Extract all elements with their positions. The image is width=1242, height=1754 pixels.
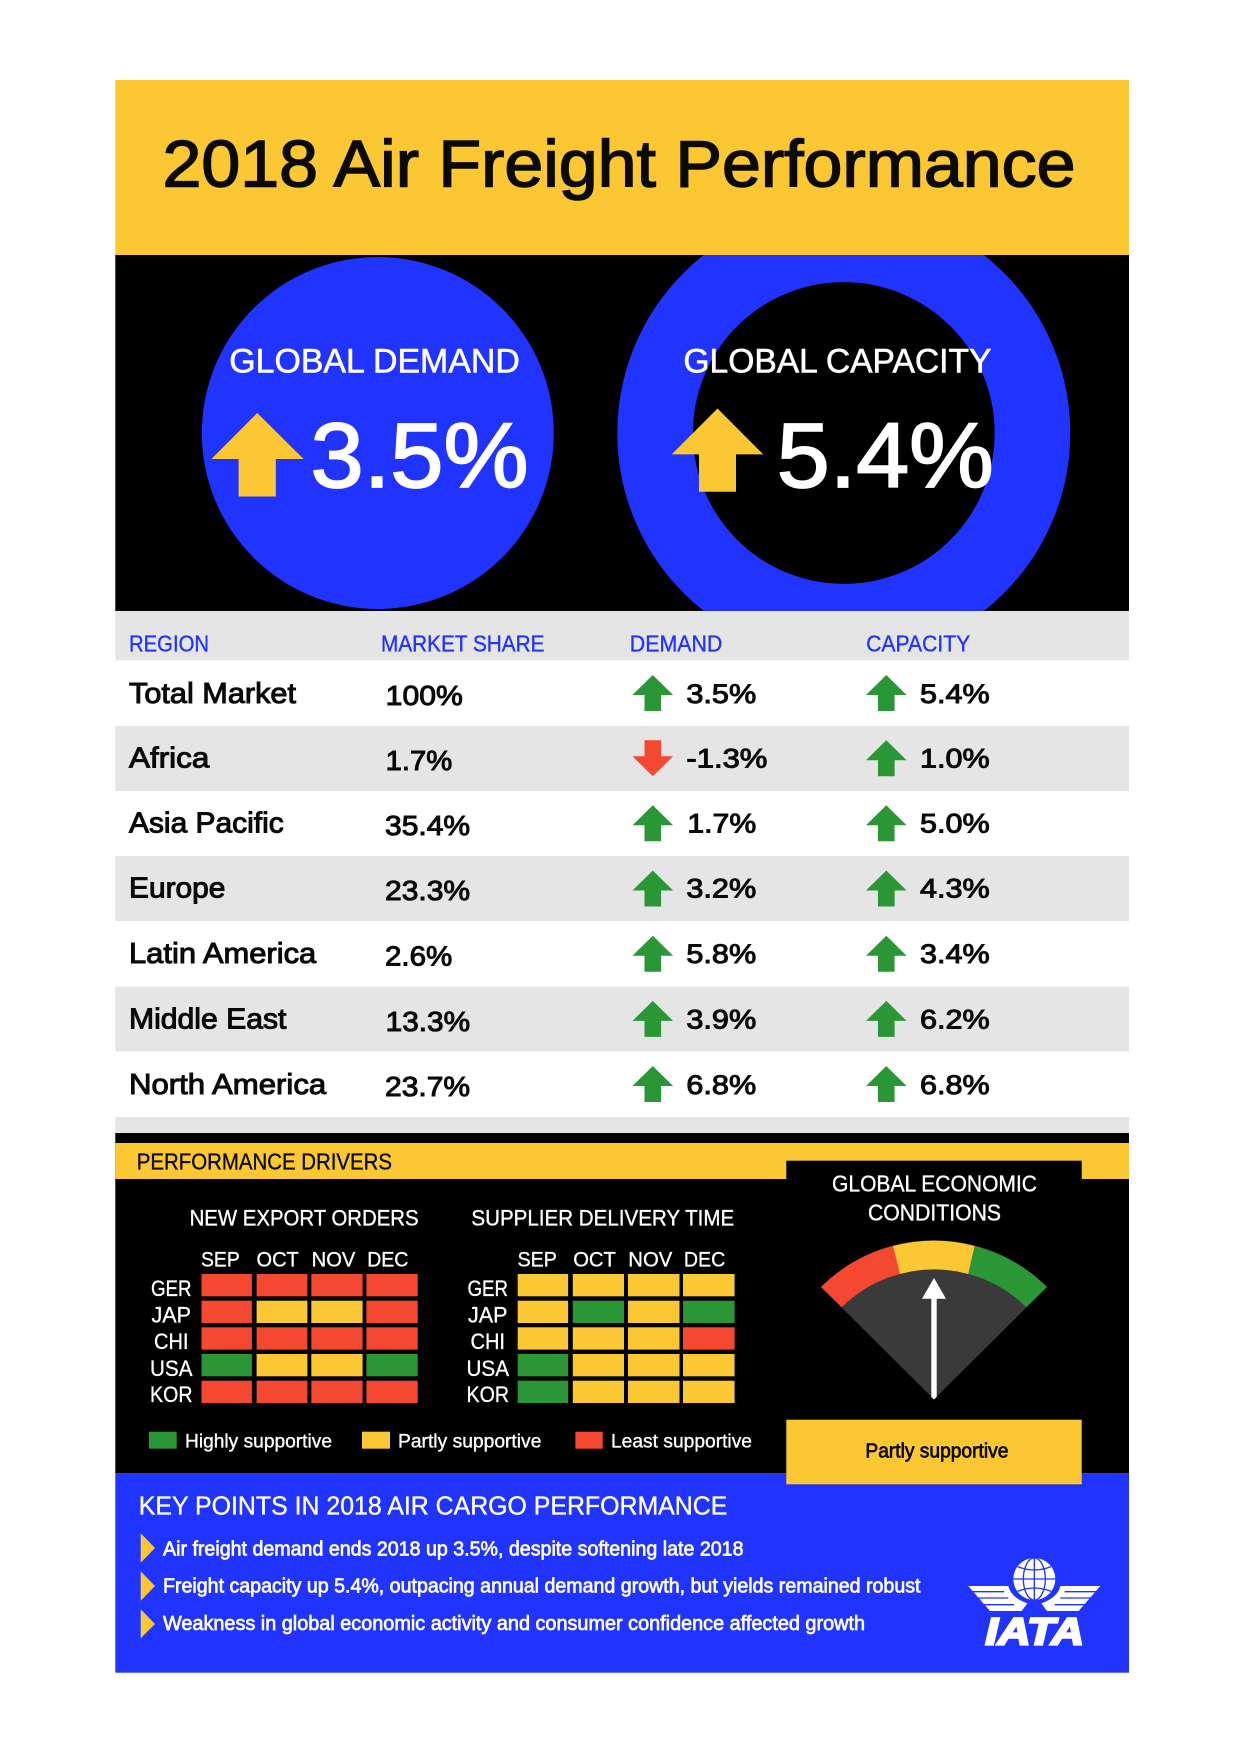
row: Total Market: Total Market — [129, 678, 296, 710]
callout: partly supportive — [786, 1420, 1082, 1484]
row: North America: North America — [129, 1069, 326, 1101]
capacity value: 5.4% — [777, 405, 994, 507]
chart: supplier delivery time heatmap: USA — [466, 1356, 509, 1381]
row: Asia Pacific — [129, 805, 990, 841]
heading: global demand: GLOBAL DEMAND — [229, 343, 520, 381]
row: Europe: 4.3% — [920, 874, 990, 904]
gauge segment: green — [968, 1246, 1047, 1307]
row: Total Market — [129, 675, 990, 711]
panel: regional table — [115, 611, 1129, 1133]
chart: new export orders heatmap: GER — [151, 1276, 192, 1301]
heading: global economic conditions: GLOBAL ECONOMIC — [832, 1171, 1037, 1197]
row: Latin America: 3.4% — [920, 939, 990, 969]
row: Latin America: 5.8% — [686, 939, 756, 969]
legend — [149, 1430, 752, 1452]
gauge — [821, 1240, 1047, 1400]
panel: performance drivers — [115, 1133, 1129, 1473]
legend: Least supportive — [611, 1430, 752, 1452]
global capacity ring — [655, 244, 1032, 622]
key point 2: Freight capacity up 5.4%, outpacing annual demand growth, but yields remained robust — [163, 1574, 921, 1597]
row: Asia Pacific: Asia Pacific — [129, 808, 284, 840]
table header: DEMAND — [630, 630, 722, 656]
icon: IATA logo — [968, 1557, 1100, 1653]
chart: supplier delivery time heatmap: SEP — [518, 1248, 557, 1272]
row: Africa: 1.7% — [386, 745, 452, 776]
chart: supplier delivery time heatmap: JAP — [468, 1302, 508, 1327]
gauge segment: yellow — [893, 1241, 975, 1274]
row: Total Market: 5.4% — [920, 679, 990, 709]
icon: IATA logo: IATA — [985, 1611, 1084, 1653]
row: Asia Pacific: 5.0% — [920, 809, 990, 839]
row: Middle East: Middle East — [129, 1004, 286, 1036]
icon: demand up arrow — [211, 413, 304, 496]
legend: Highly supportive — [185, 1430, 332, 1452]
table header: MARKET SHARE — [381, 630, 544, 656]
chart: new export orders heatmap: OCT — [256, 1248, 299, 1272]
chart: supplier delivery time heatmap: NOV — [628, 1248, 673, 1272]
chart: new export orders heatmap: USA — [150, 1356, 193, 1381]
heading: performance drivers: PERFORMANCE DRIVERS — [137, 1148, 392, 1174]
row: Latin America — [129, 936, 990, 972]
chart: new export orders heatmap: DEC — [367, 1248, 408, 1272]
row: Total Market: 3.5% — [686, 679, 756, 709]
panel: global economic conditions — [786, 1161, 1082, 1484]
row: Africa — [129, 740, 990, 776]
row: Europe — [129, 870, 990, 906]
row: Africa: Africa — [129, 743, 210, 775]
chart: supplier delivery time heatmap: GER — [468, 1276, 508, 1301]
row: Africa: 1.0% — [920, 744, 990, 774]
row: Asia Pacific: 1.7% — [687, 809, 756, 839]
chart: supplier delivery time heatmap: DEC — [684, 1248, 725, 1272]
panel: global demand and capacity — [115, 244, 1129, 622]
row: North America: 6.8% — [920, 1070, 990, 1100]
row: North America: 23.7% — [385, 1071, 470, 1102]
row: Europe: Europe — [129, 873, 225, 905]
table header — [129, 630, 970, 656]
title: 2018 Air Freight Performance — [162, 126, 1076, 200]
chart: new export orders heatmap: KOR — [150, 1382, 192, 1407]
demand value: 3.5% — [310, 405, 528, 507]
row: Africa: -1.3% — [686, 744, 767, 774]
row: North America — [129, 1066, 990, 1102]
heading: global economic conditions: CONDITIONS — [868, 1200, 1001, 1226]
callout: partly supportive: Partly supportive — [865, 1441, 1008, 1463]
chart: new export orders heatmap: CHI — [154, 1329, 188, 1354]
gauge segment: red — [821, 1246, 900, 1307]
row: Middle East: 3.9% — [686, 1004, 756, 1034]
row: Middle East — [129, 1001, 990, 1037]
row: Total Market: 100% — [386, 680, 463, 711]
chart: new export orders heatmap: NOV — [312, 1248, 356, 1272]
title banner — [115, 80, 1129, 255]
heading: global economic conditions — [832, 1171, 1037, 1226]
chart: new export orders heatmap: SEP — [201, 1248, 240, 1272]
key point 3: Weakness in global economic activity and consumer confidence affected growth — [163, 1612, 865, 1635]
global demand circle — [202, 257, 554, 609]
chart: new export orders heatmap: NEW EXPORT ORDERS — [190, 1206, 419, 1231]
chart: supplier delivery time heatmap — [466, 1206, 735, 1407]
row: Europe: 23.3% — [385, 875, 470, 906]
chart: supplier delivery time heatmap: OCT — [573, 1248, 616, 1272]
row: Middle East: 6.2% — [920, 1004, 990, 1034]
legend: Partly supportive — [398, 1430, 541, 1452]
chart: supplier delivery time heatmap: CHI — [470, 1329, 505, 1354]
chart: supplier delivery time heatmap: KOR — [466, 1382, 509, 1407]
chart: new export orders heatmap — [150, 1206, 419, 1407]
row: Asia Pacific: 35.4% — [385, 810, 470, 841]
gauge needle arrow — [922, 1278, 946, 1400]
chart: supplier delivery time heatmap: SUPPLIER DELIVERY TIME — [471, 1206, 734, 1231]
row: North America: 6.8% — [686, 1070, 756, 1100]
row: Latin America: Latin America — [129, 938, 316, 970]
key point 1: Air freight demand ends 2018 up 3.5%, despite softening late 2018 — [163, 1537, 744, 1560]
heading: key points: KEY POINTS IN 2018 AIR CARGO PERFORMANCE — [139, 1493, 727, 1521]
heading: global capacity: GLOBAL CAPACITY — [683, 343, 991, 381]
row: Europe: 3.2% — [686, 874, 756, 904]
row: Middle East: 13.3% — [386, 1006, 470, 1037]
panel: key points — [115, 1473, 1129, 1673]
icon: capacity up arrow — [672, 408, 763, 492]
table header: CAPACITY — [866, 630, 970, 656]
chart: new export orders heatmap: JAP — [152, 1302, 191, 1327]
table header: REGION — [129, 630, 209, 656]
row: Latin America: 2.6% — [385, 941, 452, 972]
